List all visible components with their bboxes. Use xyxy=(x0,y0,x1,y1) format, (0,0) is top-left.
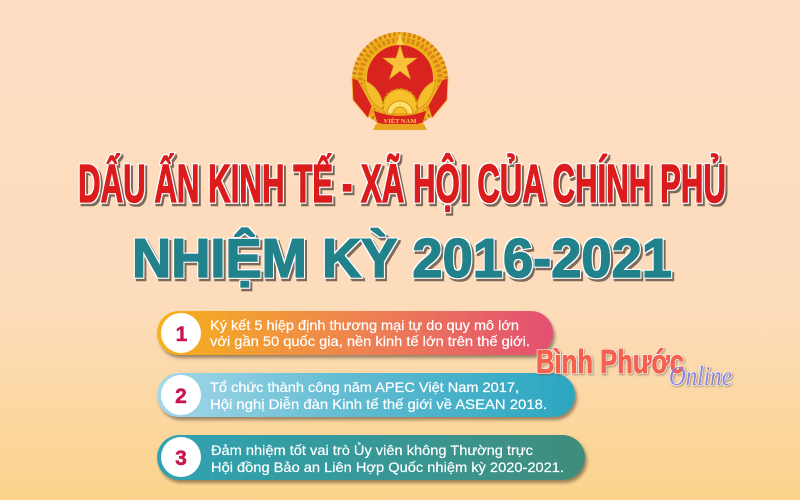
text block 2: Tổ chức thành công năm APEC Việt Nam 2017, xyxy=(210,379,519,395)
panel: achievement 2 xyxy=(157,373,575,417)
number badge 2 xyxy=(161,375,201,415)
text block 3: Hội đồng Bảo an Liên Hợp Quốc nhiệm kỳ 2020-2021. xyxy=(211,459,564,475)
watermark: Bình Phước Online: Online xyxy=(669,361,732,391)
number badge 1: 1 xyxy=(176,323,188,346)
title: teal term heading: NHIỆM KỲ 2016-2021 xyxy=(132,227,672,289)
watermark: Bình Phước Online: Bình Phước xyxy=(536,343,684,380)
number badge 1 xyxy=(161,313,201,353)
text block 2: Hội nghị Diễn đàn Kinh tế thế giới về ASEAN 2018. xyxy=(210,396,547,412)
icon: national emblem of Vietnam: VIỆT NAM xyxy=(384,117,416,125)
panel: achievement 1 xyxy=(157,311,553,355)
text block 3: Đảm nhiệm tốt vai trò Ủy viên không Thường trực xyxy=(211,441,533,458)
text block 1 xyxy=(210,317,530,349)
number badge 2: 2 xyxy=(175,385,187,408)
number badge 3: 3 xyxy=(175,447,187,470)
icon: national emblem of Vietnam xyxy=(352,32,448,130)
panel: achievement 3 xyxy=(157,435,585,480)
text block 1: Ký kết 5 hiệp định thương mại tự do quy mô lớn xyxy=(210,317,519,333)
number badge 3 xyxy=(161,437,201,477)
text block 2 xyxy=(210,379,547,412)
text block 3 xyxy=(211,441,564,475)
text block 1: với gần 50 quốc gia, nền kinh tế lớn trên thế giới. xyxy=(210,333,530,349)
